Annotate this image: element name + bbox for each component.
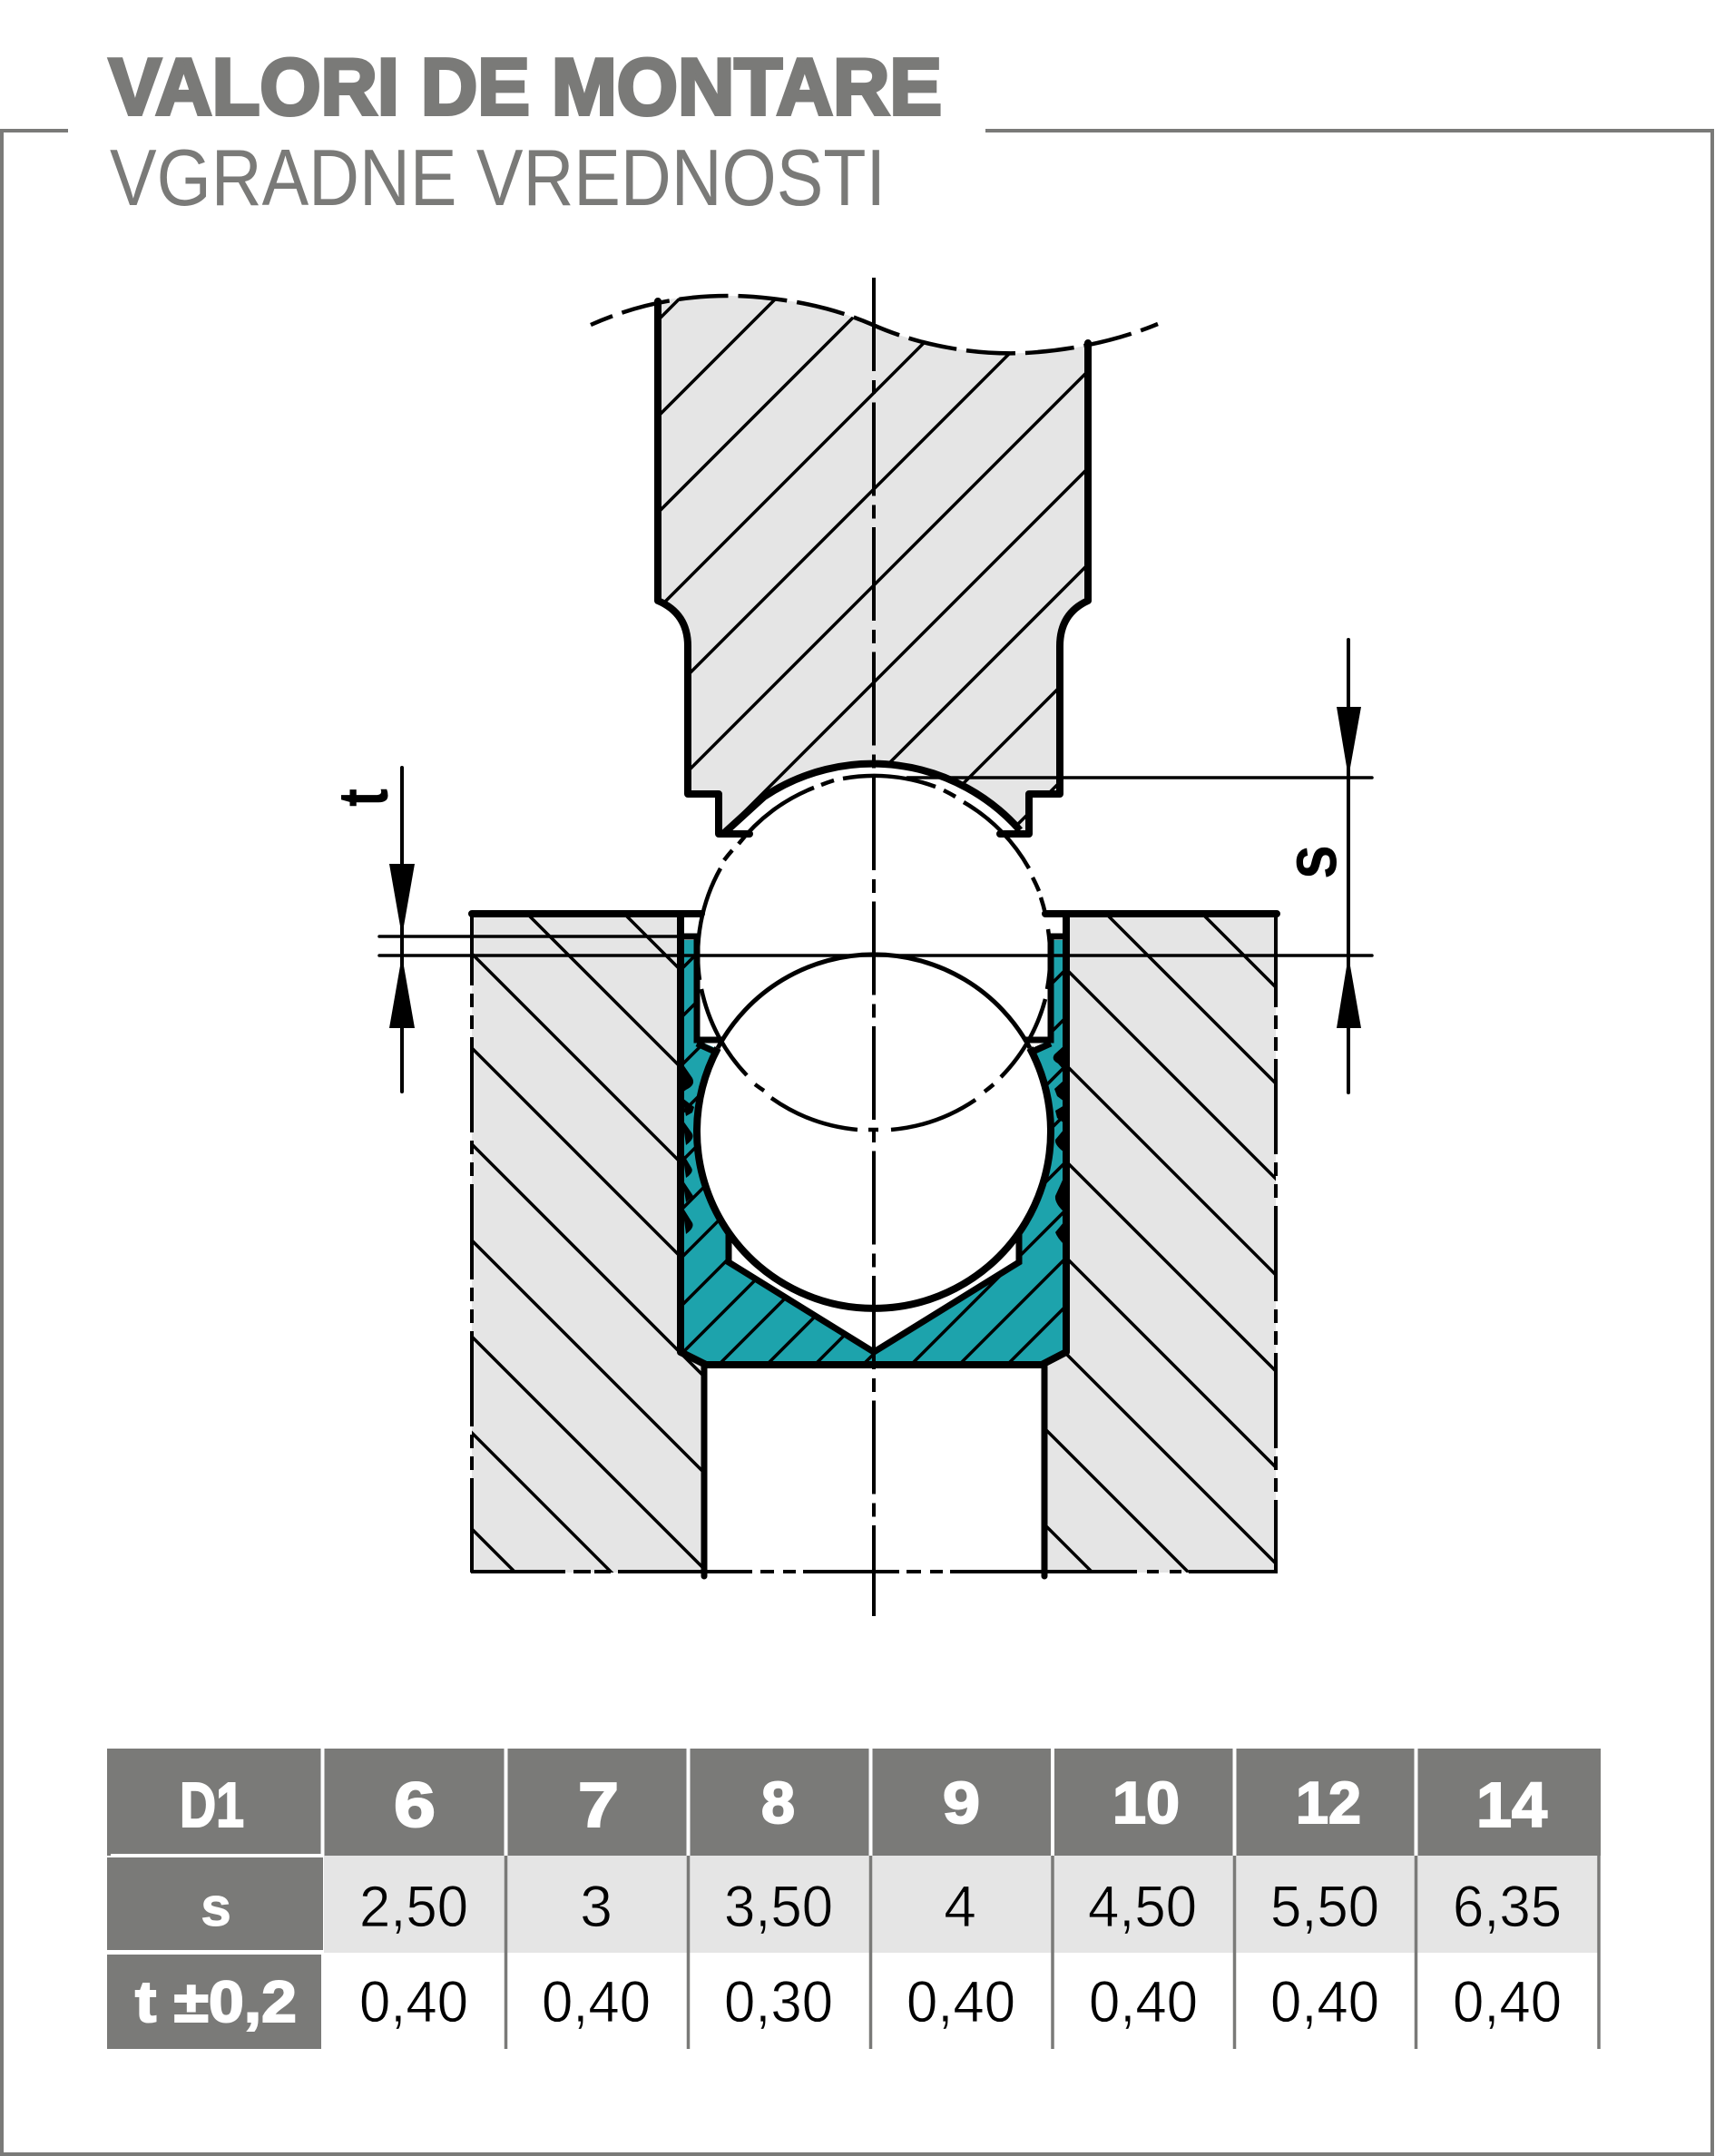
header row: 6 bbox=[394, 1769, 436, 1840]
left housing block bbox=[470, 916, 701, 1573]
row s: 3,50 bbox=[724, 1874, 833, 1939]
row t: 0,40 bbox=[1270, 1969, 1379, 2034]
row t bbox=[135, 1969, 1562, 2034]
row s: 3 bbox=[580, 1874, 612, 1939]
row t: 0,40 bbox=[542, 1969, 651, 2034]
row t: 0,40 bbox=[359, 1969, 468, 2034]
lower ball bbox=[697, 955, 1051, 1308]
header row: 12 bbox=[1296, 1769, 1361, 1836]
upper ball outline bbox=[698, 776, 1050, 1130]
housing top edges bbox=[472, 910, 1277, 917]
centre axis bbox=[872, 278, 876, 1616]
row t: 0,40 bbox=[1089, 1969, 1198, 2034]
header row: 8 bbox=[761, 1769, 795, 1836]
row s: 6,35 bbox=[1453, 1874, 1562, 1939]
row s: 2,50 bbox=[359, 1874, 468, 1939]
header row: 9 bbox=[943, 1769, 980, 1836]
row s: 4,50 bbox=[1088, 1874, 1197, 1939]
row s: s bbox=[201, 1877, 231, 1937]
table backgrounds bbox=[107, 1749, 1601, 2049]
extension lines bbox=[379, 778, 1372, 956]
row t: 0,30 bbox=[724, 1969, 833, 2034]
dimension t: t bbox=[323, 789, 403, 807]
header row bbox=[180, 1769, 1547, 1840]
title line 2: VGRADNE VREDNOSTI bbox=[110, 132, 886, 222]
dimension s bbox=[1270, 640, 1361, 1093]
row t: 0,40 bbox=[1453, 1969, 1562, 2034]
header row: 7 bbox=[578, 1769, 619, 1840]
header row: D1 bbox=[180, 1769, 244, 1840]
row s bbox=[201, 1874, 1562, 1939]
dimension s: s bbox=[1270, 845, 1352, 879]
header row: 10 bbox=[1112, 1769, 1180, 1836]
technical drawing bbox=[341, 278, 1374, 1616]
title bbox=[109, 42, 942, 222]
teal ball seat bbox=[677, 917, 1070, 1579]
row s: 4 bbox=[944, 1874, 976, 1939]
header row: 14 bbox=[1476, 1769, 1547, 1840]
bottom dash-dot edge bbox=[471, 1570, 1278, 1573]
data table bbox=[107, 1749, 1601, 2049]
punch body bbox=[590, 294, 1159, 838]
title line 1: VALORI DE MONTARE bbox=[109, 42, 942, 132]
row t: t ±0,2 bbox=[135, 1969, 297, 2034]
right housing block bbox=[1047, 916, 1278, 1573]
dimension t bbox=[323, 768, 415, 1092]
row s: 5,50 bbox=[1270, 1874, 1379, 1939]
row t: 0,40 bbox=[906, 1969, 1015, 2034]
